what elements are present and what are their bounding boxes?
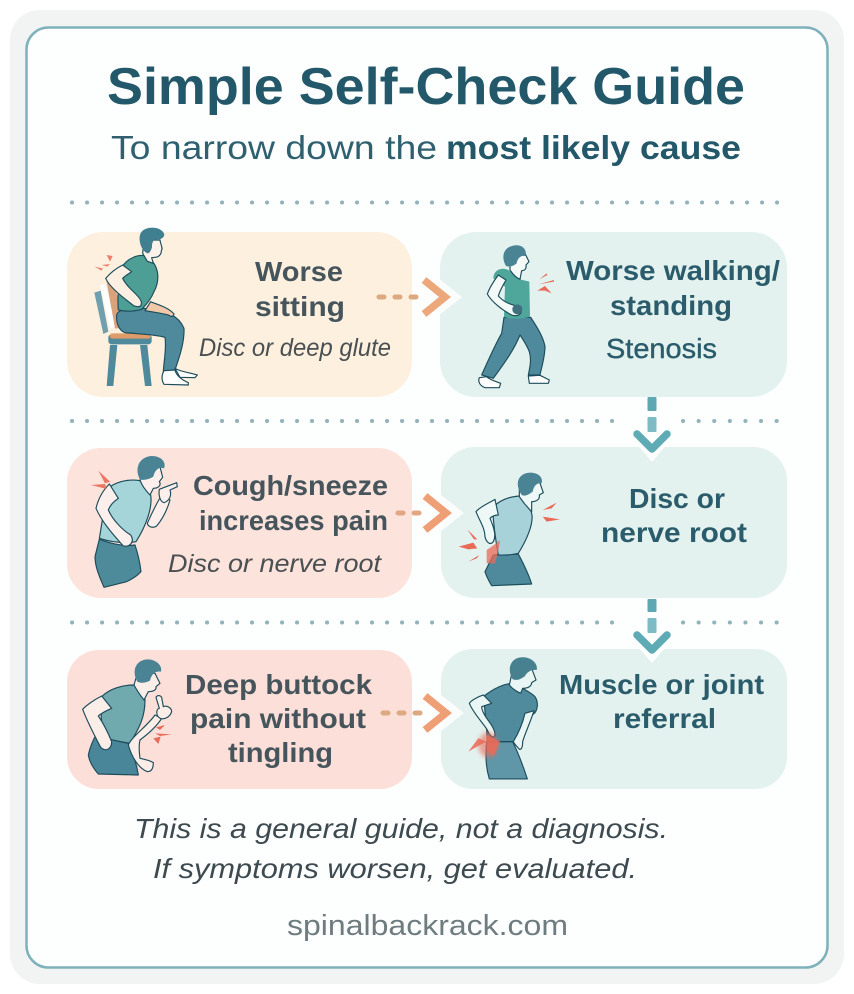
text: cough/sneeze increases pain: Cough/sneeze [193, 470, 388, 501]
website: spinalbackrack.com [287, 910, 568, 942]
text: deep buttock pain without tingling: tingling [228, 737, 333, 768]
text: deep buttock pain without tingling [185, 669, 372, 768]
disclaimer: This is a general guide, not a diagnosis. [134, 813, 668, 844]
arrow: down to disc or nerve root [625, 397, 679, 462]
text: worse walking/standing: standing [610, 290, 732, 321]
text: worse walking/standing [566, 255, 780, 321]
text: worse sitting [255, 256, 345, 322]
figure: person with low back pain [459, 473, 560, 586]
text: disc or nerve root [601, 483, 747, 548]
title: Simple Self-Check Guide [107, 58, 745, 116]
text: disc or nerve root: nerve root [601, 517, 747, 548]
text: muscle or joint referral: Muscle or joint [559, 669, 764, 700]
panel: cough or sneeze [67, 448, 412, 598]
panel: muscle or joint referral [441, 649, 787, 789]
arrow: sitting to walking [379, 270, 462, 324]
arrow: buttock to muscle [383, 686, 464, 740]
text: worse sitting: Worse [255, 256, 343, 287]
figure: person coughing [91, 456, 177, 587]
figure: person holding lower back [468, 657, 537, 779]
panel: disc or nerve root [441, 447, 787, 598]
text: disc or nerve root: Disc or [629, 483, 725, 514]
text: disc or nerve root: Disc or nerve root [168, 550, 382, 578]
text: deep buttock pain without tingling: pain without [190, 703, 366, 734]
figure: person bending with buttock pain [83, 659, 172, 775]
text: cough/sneeze increases pain [193, 470, 388, 536]
text: muscle or joint referral [559, 669, 764, 734]
subtitle: To narrow down the [111, 129, 437, 166]
arrow: cough to nerve root [398, 486, 464, 540]
figure: seated person with chair [94, 228, 197, 386]
arrow: down to muscle or joint [625, 599, 679, 663]
text: disc or deep glute: Disc or deep glute [199, 334, 391, 362]
text: cough/sneeze increases pain: increases pain [199, 505, 388, 536]
disclaimer: If symptoms worsen, get evaluated. [153, 853, 637, 884]
text: worse sitting: sitting [255, 291, 345, 322]
text: worse walking/standing: Worse walking/ [566, 255, 780, 286]
text: deep buttock pain without tingling: Deep buttock [185, 669, 372, 700]
subtitle: most likely cause [446, 129, 741, 166]
text: muscle or joint referral: referral [613, 703, 716, 734]
text: stenosis: Stenosis [606, 333, 717, 364]
subtitle [111, 129, 741, 166]
panel: deep buttock pain [67, 650, 412, 789]
panel: worse sitting [67, 228, 412, 397]
panel: worse walking or standing [440, 232, 787, 397]
disclaimer [134, 813, 668, 884]
figure: walking person [479, 245, 554, 388]
